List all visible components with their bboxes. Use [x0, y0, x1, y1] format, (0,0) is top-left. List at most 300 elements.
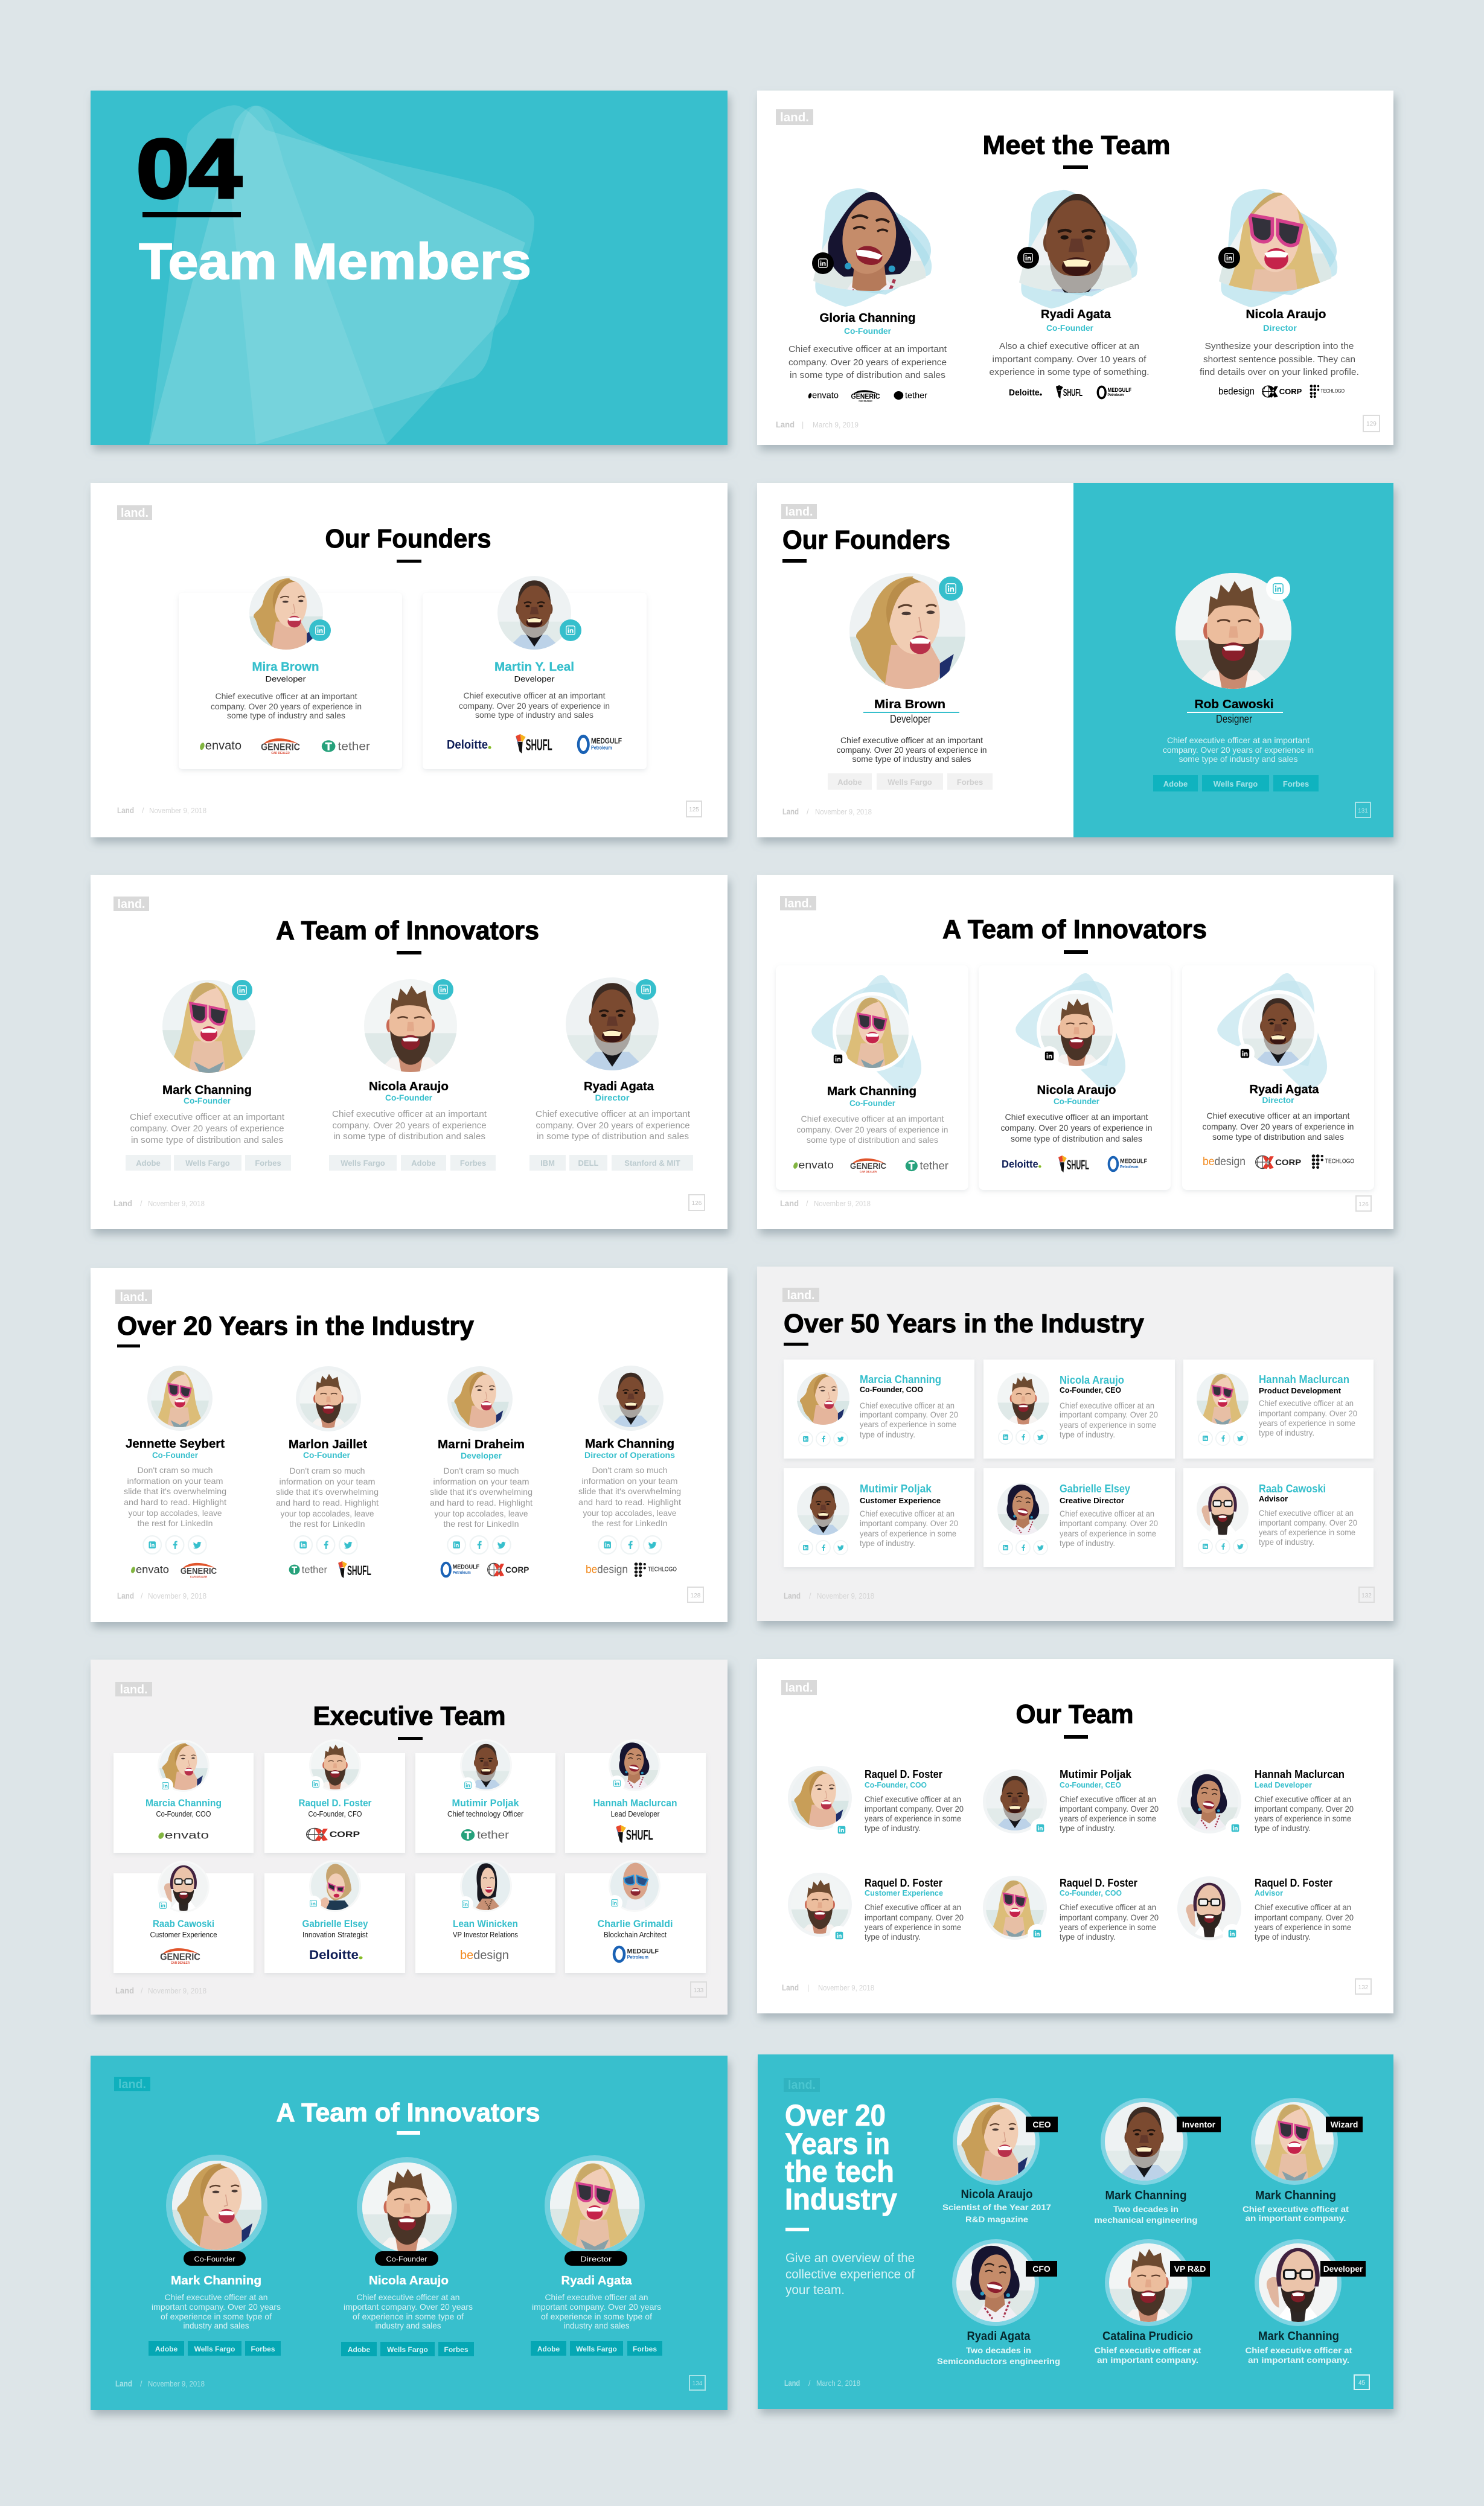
- footer: Land: [782, 1983, 799, 1992]
- card: Charlie Grimaldi: [565, 1860, 706, 1973]
- member: Marlon Jaillet: Don't cram so much: [290, 1466, 365, 1475]
- member: Nicola Araujo: Director: [1263, 323, 1297, 333]
- member: Marlon Jaillet: information on your team: [279, 1477, 376, 1486]
- logo tag: land.: [785, 505, 813, 519]
- card: Hannah Maclurcan: Chief executive officer at an: [1259, 1398, 1354, 1408]
- member: Marlon Jaillet: Co-Founder: [303, 1450, 351, 1460]
- member: Raquel D. Foster COO: years of experience in some: [865, 1814, 961, 1823]
- card: Nicola Araujo: important company. Over 20: [1060, 1410, 1158, 1419]
- footer: November 9, 2018: [148, 1592, 206, 1600]
- heading: Meet the Team: [983, 130, 1170, 160]
- member: Raquel D. Foster Customer Experience: type of industry.: [865, 1932, 921, 1942]
- card: Raquel D. Foster: Raquel D. Foster: [298, 1797, 372, 1809]
- panel: A Team of Innovators (cards): [757, 875, 1393, 1229]
- card: Martin Y. Leal: Chief executive officer at an important: [464, 691, 606, 700]
- footer: 128: [691, 1593, 701, 1599]
- member: Mira Brown: Wells Fargo: [888, 778, 932, 787]
- card: Marcia Channing: Co-Founder, COO: [156, 1809, 211, 1818]
- member: Catalina Prudicio: Chief executive officer at: [1094, 2345, 1201, 2355]
- logo tag: land.: [785, 1681, 813, 1695]
- footer: November 9, 2018: [148, 1200, 205, 1208]
- member: Ryadi Agata: important company. Over 20 years: [532, 2302, 661, 2312]
- footer: /: [141, 1987, 143, 1995]
- card: Raab Cawoski: Chief executive officer at an: [1259, 1508, 1354, 1518]
- logo tag: land.: [121, 507, 149, 520]
- heading: Years in: [785, 2127, 890, 2161]
- footer: Land: [776, 420, 795, 429]
- member: Mira Brown: company. Over 20 years of experience in: [837, 745, 987, 755]
- member: Mark Channing: Don't cram so much: [592, 1465, 668, 1475]
- member: Catalina Prudicio: [1094, 2239, 1210, 2365]
- member: Rob Cawoski: some type of industry and sales: [1179, 754, 1298, 764]
- member: Raquel D. Foster COO: [788, 1766, 964, 1840]
- member: Raquel D. Foster Advisor: type of industry.: [1255, 1932, 1311, 1942]
- footer: 45: [1358, 2380, 1365, 2386]
- member: Raquel D. Foster Advisor: Advisor: [1255, 1888, 1283, 1897]
- role pill: [375, 2251, 438, 2266]
- member: Marni Draheim: and hard to read. Highlight: [430, 1498, 533, 1507]
- heading: Over 50 Years in the Industry: [784, 1309, 1145, 1338]
- heading: A Team of Innovators: [276, 916, 539, 945]
- footer: [776, 415, 1380, 432]
- member: Rob Cawoski: Rob Cawoski: [1194, 698, 1274, 711]
- member: Rob Cawoski: [1153, 573, 1319, 791]
- member: Marni Draheim: information on your team: [433, 1477, 529, 1486]
- card: Gabrielle Elsey: [983, 1468, 1175, 1567]
- card: Mark Channing: some type of distribution and sales: [807, 1135, 938, 1145]
- card: Ryadi Agata: company. Over 20 years of experience in: [1203, 1122, 1354, 1131]
- panel: Our Team: [757, 1659, 1393, 2013]
- heading: A Team of Innovators: [942, 915, 1207, 944]
- member: Mark Channing: Co-Founder: [184, 1096, 231, 1105]
- member: Raquel D. Foster Co-Founder: Raquel D. Foster: [1060, 1877, 1137, 1889]
- card: Gabrielle Elsey: type of industry.: [1060, 1538, 1115, 1548]
- card: Martin Y. Leal: Martin Y. Leal: [494, 660, 574, 674]
- member: Ryadi Agata: Ryadi Agata: [967, 2330, 1031, 2343]
- card: Marcia Channing: [784, 1360, 974, 1459]
- member: Marlon Jaillet: the rest for LinkedIn: [290, 1519, 365, 1529]
- card: Ryadi Agata: [1182, 965, 1374, 1190]
- member: Marlon Jaillet: and hard to read. Highlight: [276, 1498, 379, 1507]
- card: Gabrielle Elsey: Gabrielle Elsey: [302, 1918, 368, 1929]
- member: Mark Channing: Director of Operations: [584, 1450, 675, 1460]
- member: Nicola Araujo: Forbes: [444, 2345, 469, 2354]
- member: Marlon Jaillet: [276, 1366, 379, 1579]
- member: Hannah Maclurcan: important company. Over 20: [1255, 1804, 1354, 1814]
- member: Mark Channing inventor: Mark Channing: [1105, 2189, 1187, 2202]
- card: Hannah Maclurcan: type of industry.: [1259, 1428, 1314, 1437]
- footer: November 9, 2018: [817, 1592, 874, 1600]
- member: Hannah Maclurcan: type of industry.: [1255, 1823, 1311, 1833]
- member: Marni Draheim: [430, 1366, 533, 1576]
- label: CFO: [1026, 2261, 1057, 2277]
- member: Mark Channing inventor: [1094, 2098, 1221, 2225]
- card: Nicola Araujo: Chief executive officer at an important: [1005, 1112, 1148, 1122]
- footer: [114, 1195, 705, 1210]
- member: Ryadi Agata: [529, 977, 693, 1171]
- panel: A Team of Innovators (teal): [91, 2056, 728, 2410]
- card: Raab Cawoski: Advisor: [1259, 1494, 1288, 1503]
- intro text: [785, 2251, 915, 2297]
- member: Raquel D. Foster Co-Founder: Co-Founder, COO: [1060, 1888, 1122, 1897]
- member: Raquel D. Foster COO: type of industry.: [865, 1823, 921, 1833]
- member: Ryadi Agata: Semiconductors engineering: [937, 2356, 1060, 2366]
- member: Mark Channing: information on your team: [582, 1476, 677, 1486]
- member: Mark Channing: Adobe: [155, 2345, 178, 2353]
- member: Gloria Channing: [788, 181, 947, 402]
- card: Raab Cawoski: important company. Over 20: [1259, 1518, 1357, 1527]
- member: Mark Channing wizard: an important company.: [1245, 2213, 1346, 2223]
- card: Marcia Channing: Chief executive officer at an: [860, 1401, 955, 1410]
- card: Raab Cawoski: [1183, 1468, 1374, 1567]
- footer: Land: [117, 1591, 134, 1600]
- footer: [115, 2376, 705, 2390]
- card: Mira Brown: some type of industry and sales: [227, 711, 345, 720]
- card: Raquel D. Foster: [264, 1739, 405, 1853]
- member: Mutimir Poljak: Co-Founder, CEO: [1060, 1780, 1121, 1789]
- logo tag: land.: [118, 2078, 146, 2091]
- card: Nicola Araujo: Nicola Araujo: [1060, 1374, 1124, 1386]
- member: Mark Channing: of experience in some type of: [161, 2312, 272, 2321]
- footer: /: [809, 1592, 811, 1600]
- member: Mark Channing: Adobe: [136, 1159, 161, 1168]
- member: Mark Channing: [149, 2155, 281, 2356]
- member: Raquel D. Foster Customer Experience: Raquel D. Foster: [865, 1877, 942, 1889]
- card: Mira Brown: Developer: [266, 674, 306, 683]
- footer: Land: [780, 1198, 799, 1208]
- member: Catalina Prudicio: Catalina Prudicio: [1102, 2330, 1193, 2343]
- member: Jennette Seybert: slide that it's overwhelming: [124, 1486, 226, 1496]
- member: Nicola Araujo: find details over on your linked profile.: [1200, 367, 1359, 377]
- member: Hannah Maclurcan: Chief executive officer at an: [1255, 1794, 1351, 1804]
- member: Marni Draheim: the rest for LinkedIn: [443, 1519, 519, 1529]
- card: Ryadi Agata: Chief executive officer at an important: [1206, 1111, 1350, 1120]
- member: Mira Brown: Adobe: [837, 778, 862, 787]
- heading: Our Team: [1015, 1699, 1134, 1729]
- member: Ryadi Agata: in some type of distribution and sales: [537, 1131, 689, 1142]
- member: Gloria Channing: Chief executive officer at an important: [788, 344, 947, 354]
- label: Developer: Developer: [1323, 2265, 1363, 2274]
- member: Jennette Seybert: Jennette Seybert: [126, 1437, 225, 1451]
- footer: November 9, 2018: [149, 807, 206, 815]
- footer: 134: [692, 2380, 703, 2387]
- member: Nicola Araujo: Adobe: [411, 1159, 436, 1168]
- footer: Land: [782, 807, 799, 816]
- card: Gabrielle Elsey: Innovation Strategist: [302, 1930, 368, 1939]
- label: Wizard: Wizard: [1331, 2120, 1358, 2129]
- footer: [780, 1196, 1371, 1211]
- card: Mutimir Poljak: [784, 1468, 974, 1567]
- member: Jennette Seybert: [124, 1366, 226, 1578]
- card: Charlie Grimaldi: Charlie Grimaldi: [598, 1918, 673, 1929]
- logo tag: land.: [788, 2079, 816, 2092]
- label: Wizard: [1326, 2117, 1363, 2132]
- footer: November 9, 2018: [814, 1200, 871, 1208]
- member: Nicola Araujo: Chief executive officer at an important: [332, 1109, 487, 1119]
- card: Nicola Araujo: Chief executive officer at an: [1060, 1401, 1154, 1410]
- card: Nicola Araujo: years of experience in some: [1060, 1420, 1156, 1430]
- card: Martin Y. Leal: [423, 575, 647, 769]
- intro text: collective experience of: [785, 2268, 915, 2281]
- role pill: [184, 2251, 246, 2266]
- card: Hannah Maclurcan: important company. Over 20: [1259, 1408, 1357, 1418]
- card: Mutimir Poljak: Chief executive officer at an: [860, 1509, 955, 1518]
- member: Nicola Araujo: Nicola Araujo: [369, 1080, 449, 1093]
- footer: [782, 802, 1370, 817]
- footer: /: [140, 2380, 142, 2388]
- heading: A Team of Innovators: [277, 2098, 540, 2127]
- member: Mark Channing developer: Mark Channing: [1258, 2330, 1339, 2343]
- card: Gabrielle Elsey: [264, 1860, 405, 1973]
- member: Mark Channing developer: [1245, 2239, 1366, 2365]
- member: Nicola Araujo: company. Over 20 years of experience: [332, 1120, 487, 1131]
- card: Mark Channing: Chief executive officer at an important: [801, 1114, 944, 1124]
- footer: November 9, 2018: [815, 808, 872, 816]
- footer: Land: [117, 805, 134, 815]
- member: Jennette Seybert: and hard to read. Highlight: [124, 1497, 226, 1507]
- member: Raquel D. Foster Advisor: [1177, 1876, 1354, 1943]
- member: Jennette Seybert: Co-Founder: [152, 1450, 199, 1460]
- footer: /: [140, 1200, 142, 1208]
- card: Hannah Maclurcan: Hannah Maclurcan: [1259, 1373, 1349, 1386]
- footer: March 2, 2018: [816, 2379, 860, 2388]
- member: Raquel D. Foster Advisor: Raquel D. Foster: [1255, 1877, 1332, 1889]
- footer: Land: [784, 1591, 801, 1600]
- card: Gabrielle Elsey: Gabrielle Elsey: [1060, 1483, 1130, 1495]
- card: Mira Brown: company. Over 20 years of experience in: [211, 702, 362, 711]
- card: Mutimir Poljak: years of experience in some: [860, 1529, 956, 1538]
- card: Mira Brown: Mira Brown: [252, 660, 319, 674]
- footer: November 9, 2018: [148, 1987, 206, 1995]
- member: Raquel D. Foster Co-Founder: years of experience in some: [1060, 1922, 1156, 1932]
- member: Ryadi Agata: [531, 2155, 662, 2356]
- member: Mira Brown: Mira Brown: [874, 698, 945, 711]
- card: Marcia Channing: important company. Over 20: [860, 1410, 958, 1419]
- heading: Executive Team: [313, 1701, 506, 1731]
- member: Nicola Araujo: Synthesize your description into the: [1205, 341, 1354, 351]
- card: Mutimir Poljak: Customer Experience: [860, 1496, 941, 1505]
- card: Lean Winicken: VP Investor Relations: [453, 1930, 518, 1939]
- member: Ryadi Agata: Chief executive officer at an important: [536, 1109, 691, 1119]
- member: Nicola Araujo: Scientist of the Year 2017: [942, 2202, 1051, 2212]
- member: Mark Channing: your top accolades, leave: [583, 1508, 677, 1518]
- logo tag: land.: [784, 897, 812, 910]
- member: Nicola Araujo: Adobe: [348, 2345, 370, 2354]
- member: Ryadi Agata: experience in some type of something.: [989, 367, 1150, 377]
- card: Ryadi Agata: some type of distribution and sales: [1212, 1132, 1344, 1142]
- member: Ryadi Agata: company. Over 20 years of experience: [536, 1120, 689, 1131]
- member: Mark Channing: Chief executive officer at an important: [130, 1112, 285, 1122]
- member: Mutimir Poljak: [983, 1768, 1159, 1838]
- footer: March 9, 2019: [813, 421, 859, 429]
- card: Marcia Channing: years of experience in some: [860, 1419, 956, 1429]
- member: Mark Channing: Forbes: [251, 2345, 275, 2353]
- member: Raquel D. Foster Co-Founder: Chief executive officer at an: [1060, 1902, 1156, 1912]
- card: Marcia Channing: Co-Founder, COO: [860, 1385, 923, 1394]
- member: Hannah Maclurcan: Hannah Maclurcan: [1255, 1768, 1345, 1780]
- member: Mutimir Poljak: Mutimir Poljak: [1060, 1768, 1132, 1780]
- card: Mutimir Poljak: [415, 1739, 555, 1853]
- member: Nicola Araujo: Wells Fargo: [387, 2345, 428, 2354]
- footer: 132: [1358, 1984, 1369, 1991]
- member: Mutimir Poljak: years of experience in some: [1060, 1814, 1156, 1823]
- card: Ryadi Agata: Ryadi Agata: [1250, 1083, 1319, 1096]
- footer: 131: [1358, 808, 1368, 814]
- member: Gloria Channing: Co-Founder: [844, 326, 892, 336]
- footer: /: [142, 807, 144, 815]
- heading: the tech: [785, 2155, 894, 2188]
- member: Raquel D. Foster COO: Raquel D. Foster: [865, 1768, 942, 1780]
- label: CEO: [1026, 2117, 1058, 2132]
- member: Mira Brown: [828, 573, 993, 790]
- card: Raab Cawoski: years of experience in some: [1259, 1527, 1355, 1537]
- member: Rob Cawoski: Adobe: [1163, 779, 1188, 788]
- member: Nicola Araujo: important company. Over 20 years: [344, 2302, 473, 2312]
- logo tag: land.: [120, 1683, 147, 1696]
- member: Nicola Araujo: [329, 979, 496, 1171]
- heading: Our Founders: [325, 524, 491, 554]
- member: Mark Channing wizard: Mark Channing: [1255, 2189, 1336, 2202]
- member: Nicola Araujo: Co-Founder: [385, 1093, 433, 1102]
- heading: Over 20 Years in the Industry: [117, 1311, 475, 1341]
- member: Mark Channing: the rest for LinkedIn: [592, 1518, 668, 1528]
- card: Hannah Maclurcan: years of experience in some: [1259, 1418, 1355, 1428]
- label: Inventor: [1177, 2117, 1221, 2132]
- member: Mark Channing inventor: Two decades in: [1113, 2204, 1179, 2214]
- member: Jennette Seybert: your top accolades, leave: [128, 1508, 222, 1518]
- card: Marcia Channing: Marcia Channing: [860, 1373, 941, 1386]
- member: Ryadi Agata: of experience in some type of: [541, 2312, 652, 2321]
- card: Martin Y. Leal: Developer: [514, 674, 555, 683]
- member: Nicola Araujo: Nicola Araujo: [369, 2274, 449, 2287]
- member: Ryadi Agata: Ryadi Agata: [561, 2274, 632, 2287]
- card: Raab Cawoski: Raab Cawoski: [153, 1918, 214, 1929]
- member: Hannah Maclurcan: [1177, 1768, 1354, 1838]
- footer: [784, 1587, 1374, 1602]
- role pill: [564, 2251, 627, 2266]
- member: Ryadi Agata: Forbes: [633, 2345, 657, 2353]
- card: Mutimir Poljak: important company. Over 20: [860, 1518, 958, 1528]
- card: Hannah Maclurcan: Lead Developer: [611, 1809, 660, 1818]
- member: Marni Draheim: your top accolades, leave: [435, 1509, 528, 1518]
- member: Raquel D. Foster Customer Experience: Customer Experience: [865, 1888, 943, 1897]
- footer: 125: [689, 807, 699, 813]
- card: Raab Cawoski: type of industry.: [1259, 1537, 1314, 1547]
- card: Lean Winicken: [415, 1860, 555, 1973]
- card: Mutimir Poljak: Chief technology Officer: [447, 1809, 524, 1818]
- label: CFO: CFO: [1032, 2264, 1051, 2274]
- panel: Executive Team: [91, 1660, 728, 2015]
- member: Mark Channing developer: an important company.: [1248, 2355, 1349, 2365]
- member: Raquel D. Foster COO: important company. Over 20: [865, 1804, 964, 1814]
- member: Rob Cawoski: Forbes: [1283, 779, 1309, 788]
- member: Gloria Channing: company. Over 20 years of experience: [788, 357, 947, 368]
- card: Marcia Channing: [114, 1740, 254, 1853]
- card: Raab Cawoski: Raab Cawoski: [1259, 1483, 1326, 1495]
- member: Mark Channing: in some type of distribution and sales: [131, 1135, 283, 1145]
- member: Mark Channing: Wells Fargo: [185, 1159, 230, 1168]
- member: Mira Brown: Developer: [890, 713, 931, 725]
- member: Ryadi Agata: Stanford & MIT: [624, 1159, 680, 1168]
- cover abstract shape: [149, 105, 534, 444]
- footer: November 9, 2018: [148, 2380, 205, 2388]
- heading: Industry: [785, 2182, 897, 2216]
- member: Raquel D. Foster Advisor: years of experience in some: [1255, 1922, 1351, 1932]
- card: Gabrielle Elsey: Creative Director: [1060, 1496, 1124, 1505]
- member: Ryadi Agata: Two decades in: [966, 2345, 1031, 2355]
- member: Raquel D. Foster Customer Experience: important company. Over 20: [865, 1913, 964, 1922]
- member: Nicola Araujo: [341, 2157, 474, 2356]
- member: Ryadi Agata: Ryadi Agata: [584, 1080, 654, 1093]
- card: Raab Cawoski: [114, 1861, 254, 1973]
- footer: 132: [1361, 1593, 1372, 1599]
- label: VP R&D: [1170, 2261, 1210, 2277]
- member: Ryadi Agata: Director: [595, 1093, 630, 1102]
- card: Hannah Maclurcan: Hannah Maclurcan: [593, 1797, 677, 1809]
- card: Mark Channing: Mark Channing: [827, 1085, 916, 1098]
- footer: [117, 801, 702, 817]
- card: Nicola Araujo: Nicola Araujo: [1037, 1084, 1116, 1097]
- footer: Land: [114, 1198, 132, 1208]
- card: Mira Brown: Chief executive officer at an important: [215, 692, 357, 701]
- card: Mutimir Poljak: type of industry.: [860, 1538, 915, 1548]
- member: Raquel D. Foster COO: Chief executive officer at an: [865, 1794, 961, 1804]
- panel: A Team of Innovators (tags): [91, 875, 728, 1229]
- member: Marni Draheim: slide that it's overwhelming: [430, 1487, 533, 1497]
- card: Nicola Araujo: [979, 965, 1171, 1190]
- card: Mark Channing: [776, 965, 968, 1190]
- member: Ryadi Agata: Co-Founder: [1046, 323, 1094, 333]
- logo tag: land.: [117, 898, 145, 911]
- member: Marni Draheim: Don't cram so much: [443, 1466, 519, 1475]
- member: Gloria Channing: in some type of distribution and sales: [790, 370, 945, 380]
- member: Jennette Seybert: the rest for LinkedIn: [138, 1518, 213, 1528]
- logo tag: land.: [787, 1289, 815, 1302]
- card: Nicola Araujo: Co-Founder: [1054, 1096, 1100, 1106]
- card: Mark Channing: company. Over 20 years of experience in: [797, 1125, 948, 1134]
- heading: [785, 2098, 897, 2216]
- card: Hannah Maclurcan: [565, 1739, 706, 1853]
- member: Raquel D. Foster COO: Co-Founder, COO: [865, 1780, 927, 1789]
- member: Mark Channing developer: Chief executive officer at: [1245, 2345, 1352, 2355]
- card: Nicola Araujo: company. Over 20 years of experience in: [1001, 1123, 1152, 1133]
- footer: November 9, 2018: [818, 1984, 874, 1992]
- member: Rob Cawoski: company. Over 20 years of experience in: [1163, 745, 1314, 755]
- member: Ryadi Agata: IBM: [540, 1159, 555, 1168]
- member: Mark Channing: [578, 1366, 681, 1577]
- member: Ryadi Agata: DELL: [578, 1159, 599, 1168]
- member: Ryadi Agata: important company. Over 10 years of: [993, 354, 1147, 365]
- member: Marni Draheim: Developer: [461, 1451, 502, 1460]
- card: Hannah Maclurcan: Product Development: [1259, 1386, 1342, 1395]
- member: Marlon Jaillet: your top accolades, leave: [280, 1509, 374, 1518]
- member: Marlon Jaillet: slide that it's overwhelming: [276, 1487, 379, 1497]
- member: Catalina Prudicio: an important company.: [1097, 2355, 1198, 2365]
- member: Mark Channing: industry and sales: [184, 2321, 249, 2330]
- member: Hannah Maclurcan: years of experience in some: [1255, 1814, 1351, 1823]
- footer: Land: [115, 2379, 132, 2388]
- member: Mira Brown: Chief executive officer at an important: [840, 735, 983, 745]
- label: Inventor: Inventor: [1182, 2120, 1216, 2129]
- card: Gabrielle Elsey: Chief executive officer at an: [1060, 1509, 1154, 1518]
- member: Mutimir Poljak: Chief executive officer at an: [1060, 1794, 1156, 1804]
- logo tag: [781, 1680, 817, 1695]
- member: Raquel D. Foster Customer Experience: [788, 1873, 964, 1945]
- member: Raquel D. Foster Co-Founder: [983, 1876, 1159, 1943]
- section number 04: 04: [136, 123, 241, 216]
- card: Nicola Araujo: type of industry.: [1060, 1430, 1115, 1439]
- panel: Over 20 Years in the tech Industry: [758, 2054, 1393, 2409]
